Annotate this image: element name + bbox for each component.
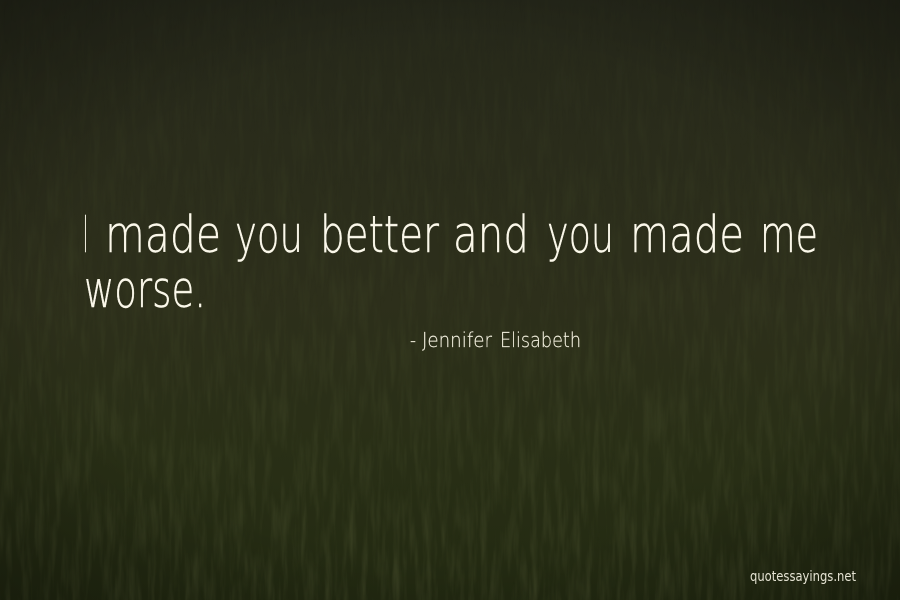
watermark: quotessayings.net [750,569,856,585]
quote text [83,206,818,320]
quote text: made [630,206,744,265]
quote text: and [453,206,529,265]
quote text: me [760,206,818,265]
author attribution: Elisabeth [500,328,581,352]
author attribution: - [410,328,416,352]
quote text: worse. [84,261,206,320]
author attribution: Jennifer [422,328,493,352]
quote text: you [547,206,614,265]
quote text: I [83,206,88,265]
author attribution [410,328,581,352]
quote text: made [105,206,221,265]
quote text: better [320,206,439,265]
quote text: you [235,206,303,265]
